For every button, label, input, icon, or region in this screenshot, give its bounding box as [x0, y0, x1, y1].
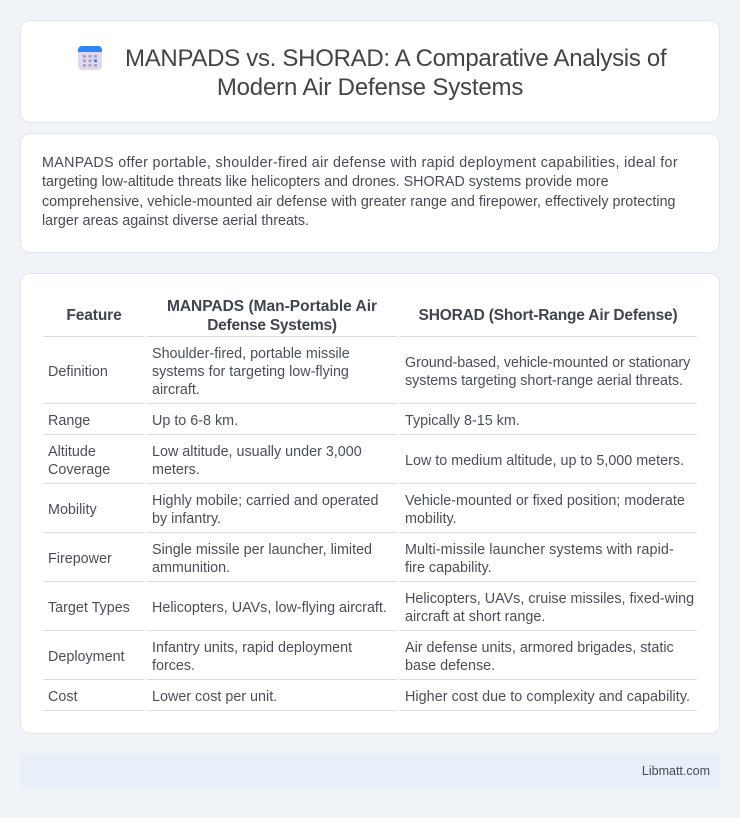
row: altitude coverage: Low altitude, usually under 3,000: [152, 444, 362, 460]
row: range: Up to 6-8 km.: [152, 413, 238, 429]
row: range: Typically 8-15 km.: [405, 413, 520, 429]
title: MANPADS vs. SHORAD: A Comparative Analysis of: [125, 45, 666, 72]
row: firepower: fire capability.: [405, 560, 492, 576]
table header row: SHORAD (Short-Range Air Defense): [419, 307, 677, 324]
row: definition: Ground-based, vehicle-mounted or stationary: [405, 355, 690, 371]
row: cost: Higher cost due to complexity and capability.: [405, 689, 690, 705]
row: mobility: by infantry.: [152, 511, 221, 527]
icon: calendar: [78, 46, 102, 70]
title: Modern Air Defense Systems: [217, 74, 523, 101]
row: mobility: Mobility: [48, 502, 97, 518]
row: target types: Helicopters, UAVs, low-flying aircraft.: [152, 600, 387, 616]
row: definition: systems targeting short-range aerial threats.: [405, 373, 683, 389]
row: deployment: forces.: [152, 658, 195, 674]
panel: comparison table card: [20, 273, 720, 734]
row: mobility: Highly mobile; carried and operated: [152, 493, 378, 509]
row: altitude coverage: Altitude: [48, 444, 96, 460]
row: deployment: Deployment: [48, 649, 125, 665]
row: firepower: ammunition.: [152, 560, 230, 576]
row: cost: Cost: [48, 689, 78, 705]
row: deployment: base defense.: [405, 658, 495, 674]
row: target types: Target Types: [48, 600, 130, 616]
row: cost: Lower cost per unit.: [152, 689, 277, 705]
text block: intro paragraph: comprehensive, vehicle-mounted air defense with greater range and firepower, effectively protecting: [42, 194, 676, 210]
row: definition: aircraft.: [152, 382, 200, 398]
text block: intro paragraph: larger areas against diverse aerial threats.: [42, 213, 309, 229]
row: altitude coverage: Coverage: [48, 462, 110, 478]
row: range: Range: [48, 413, 90, 429]
table header row: Feature: [66, 307, 122, 324]
row: definition: Definition: [48, 364, 108, 380]
row: deployment: Air defense units, armored brigades, static: [405, 640, 674, 656]
row: definition: Shoulder-fired, portable missile: [152, 346, 350, 362]
footer text: Libmatt.com: [642, 764, 710, 778]
row: mobility: mobility.: [405, 511, 457, 527]
row: firepower: Multi-missile launcher systems with rapid-: [405, 542, 674, 558]
text block: intro paragraph: MANPADS offer portable, shoulder-fired air defense with rapid deployment capabilities, ideal for: [42, 155, 678, 171]
row: target types: aircraft at short range.: [405, 609, 545, 625]
row: mobility: Vehicle-mounted or fixed position; moderate: [405, 493, 685, 509]
row: altitude coverage: meters.: [152, 462, 200, 478]
panel: title header: [20, 20, 720, 123]
footer bar: [20, 754, 720, 788]
table header row: MANPADS (Man-Portable Air: [167, 298, 377, 315]
table header row: Defense Systems): [207, 317, 337, 334]
row: firepower: Firepower: [48, 551, 112, 567]
row: altitude coverage: Low to medium altitude, up to 5,000 meters.: [405, 453, 684, 469]
text block: intro paragraph: targeting low-altitude threats like helicopters and drones. SHORAD systems provide more: [42, 174, 609, 190]
row: firepower: Single missile per launcher, limited: [152, 542, 372, 558]
row: definition: systems for targeting low-flying: [152, 364, 349, 380]
row: deployment: Infantry units, rapid deployment: [152, 640, 352, 656]
panel: intro summary: [20, 133, 720, 253]
text block: intro paragraph: [42, 155, 678, 229]
row: target types: Helicopters, UAVs, cruise missiles, fixed-wing: [405, 591, 694, 607]
